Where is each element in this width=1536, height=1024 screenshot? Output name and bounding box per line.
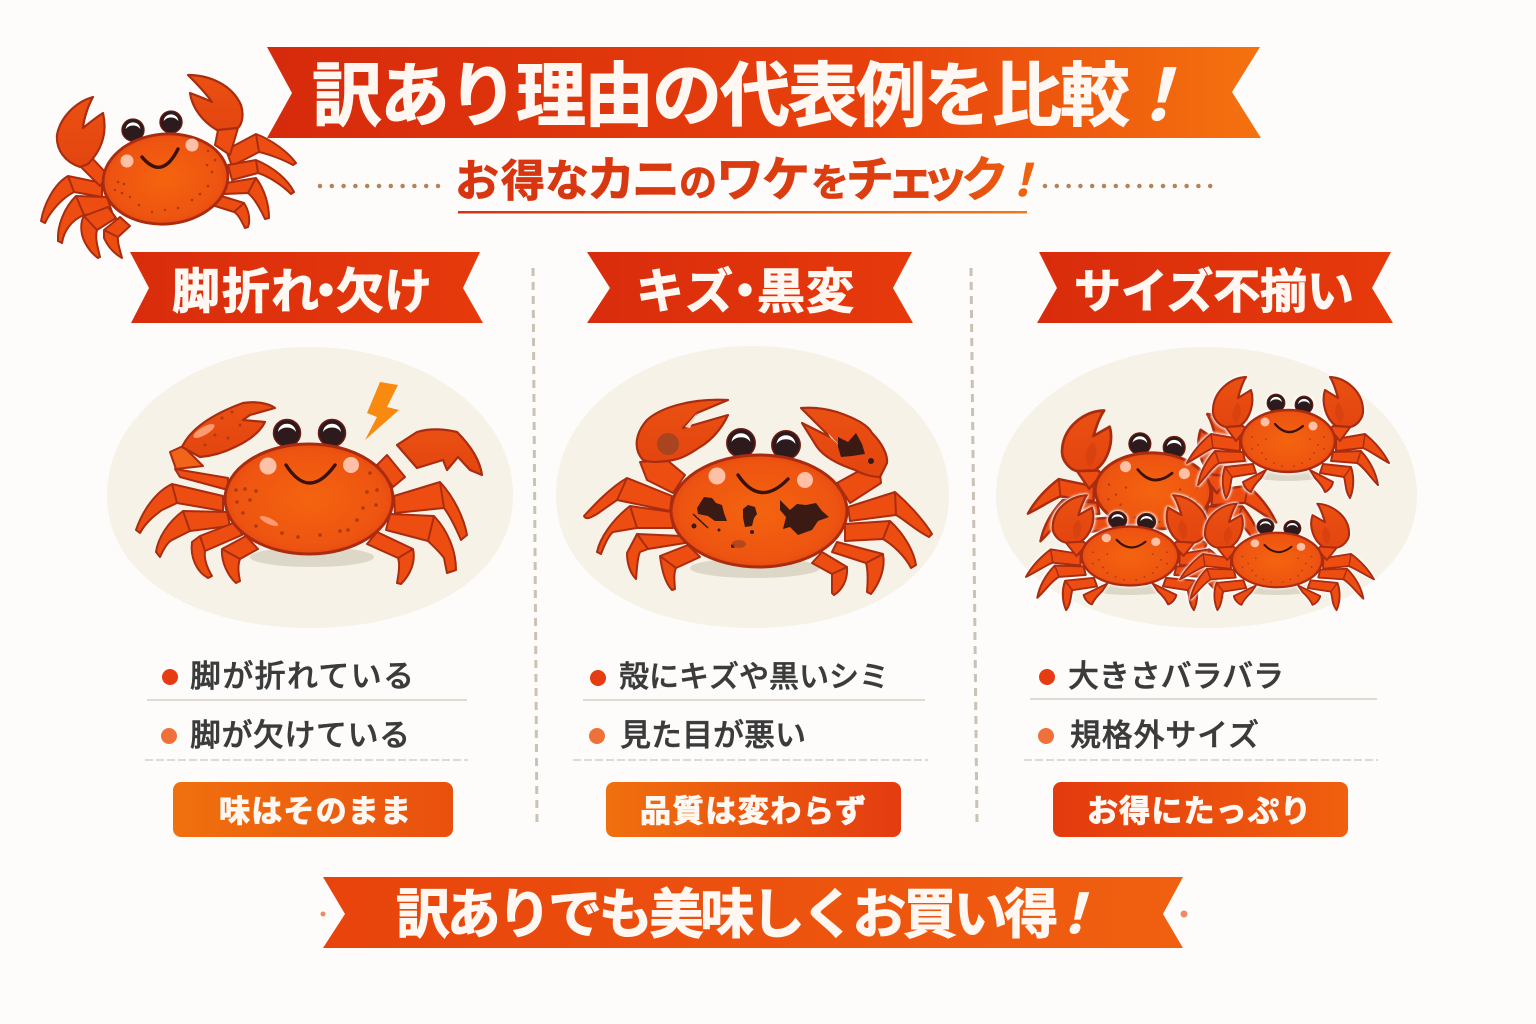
title: 訳あり理由の代表例を比較！: [312, 57, 1192, 135]
title ribbon: [267, 47, 1261, 138]
subtitle: の: [679, 163, 717, 205]
panel: broken legs: [107, 252, 513, 837]
crab: front left: [1026, 495, 1234, 610]
heading ribbon: scratches: キズ・黒変: [636, 266, 854, 319]
bullet list: broken legs: 脚が折れている: [190, 659, 414, 694]
callout: taste unchanged: 味はそのまま: [219, 794, 411, 829]
panel: uneven sizes: [996, 252, 1417, 837]
illustration: four crabs of different sizes: [996, 347, 1417, 628]
subtitle: ワケ: [716, 154, 810, 207]
illustration: crab with black spots: [556, 346, 949, 628]
bullet list: broken legs: [145, 659, 468, 760]
illustration: crab with broken claw: [107, 347, 513, 628]
bullet list: uneven sizes: [1024, 659, 1378, 760]
subtitle: [320, 154, 1215, 214]
subtitle: ！: [1000, 157, 1044, 206]
bullet list: scratches: [573, 661, 928, 760]
heading ribbon: uneven sizes: [1037, 252, 1393, 323]
bullet list: broken legs: 脚が欠けている: [190, 718, 410, 753]
crab: large back left: [1026, 408, 1280, 565]
black spots: [692, 433, 874, 548]
bullet list: scratches: 殻にキズや黒いシミ: [619, 661, 889, 694]
bottom banner: [320, 877, 1188, 948]
callout: quality unchanged: 品質は変わらず: [640, 794, 866, 829]
callout: taste unchanged: [173, 782, 453, 837]
panel: scratches and black spots: [556, 252, 949, 837]
bullet list: uneven sizes: 規格外サイズ: [1070, 718, 1259, 753]
heading ribbon: broken legs: 脚折れ・欠け: [172, 266, 432, 319]
bottom banner: 訳ありでも美味しくお買い得！: [396, 885, 1101, 945]
mascot crab: [41, 75, 296, 258]
bullet list: scratches: 見た目が悪い: [620, 718, 806, 753]
crab: front right: [1180, 504, 1374, 610]
callout: plenty for the price: [1053, 782, 1348, 837]
subtitle: チェック: [846, 154, 1009, 207]
bullet list: uneven sizes: 大きさバラバラ: [1068, 659, 1284, 694]
subtitle: カニ: [587, 154, 680, 207]
subtitle: お得な: [455, 157, 589, 206]
subtitle: を: [811, 163, 849, 205]
heading ribbon: broken legs: [130, 252, 483, 323]
heading ribbon: scratches: [587, 252, 913, 323]
callout: plenty for the price: お得にたっぷり: [1087, 794, 1311, 829]
callout: quality unchanged: [606, 782, 901, 837]
icon: lightning bolt: [365, 382, 399, 440]
heading ribbon: uneven sizes: サイズ不揃い: [1074, 265, 1354, 318]
crab: top right: [1187, 377, 1389, 498]
